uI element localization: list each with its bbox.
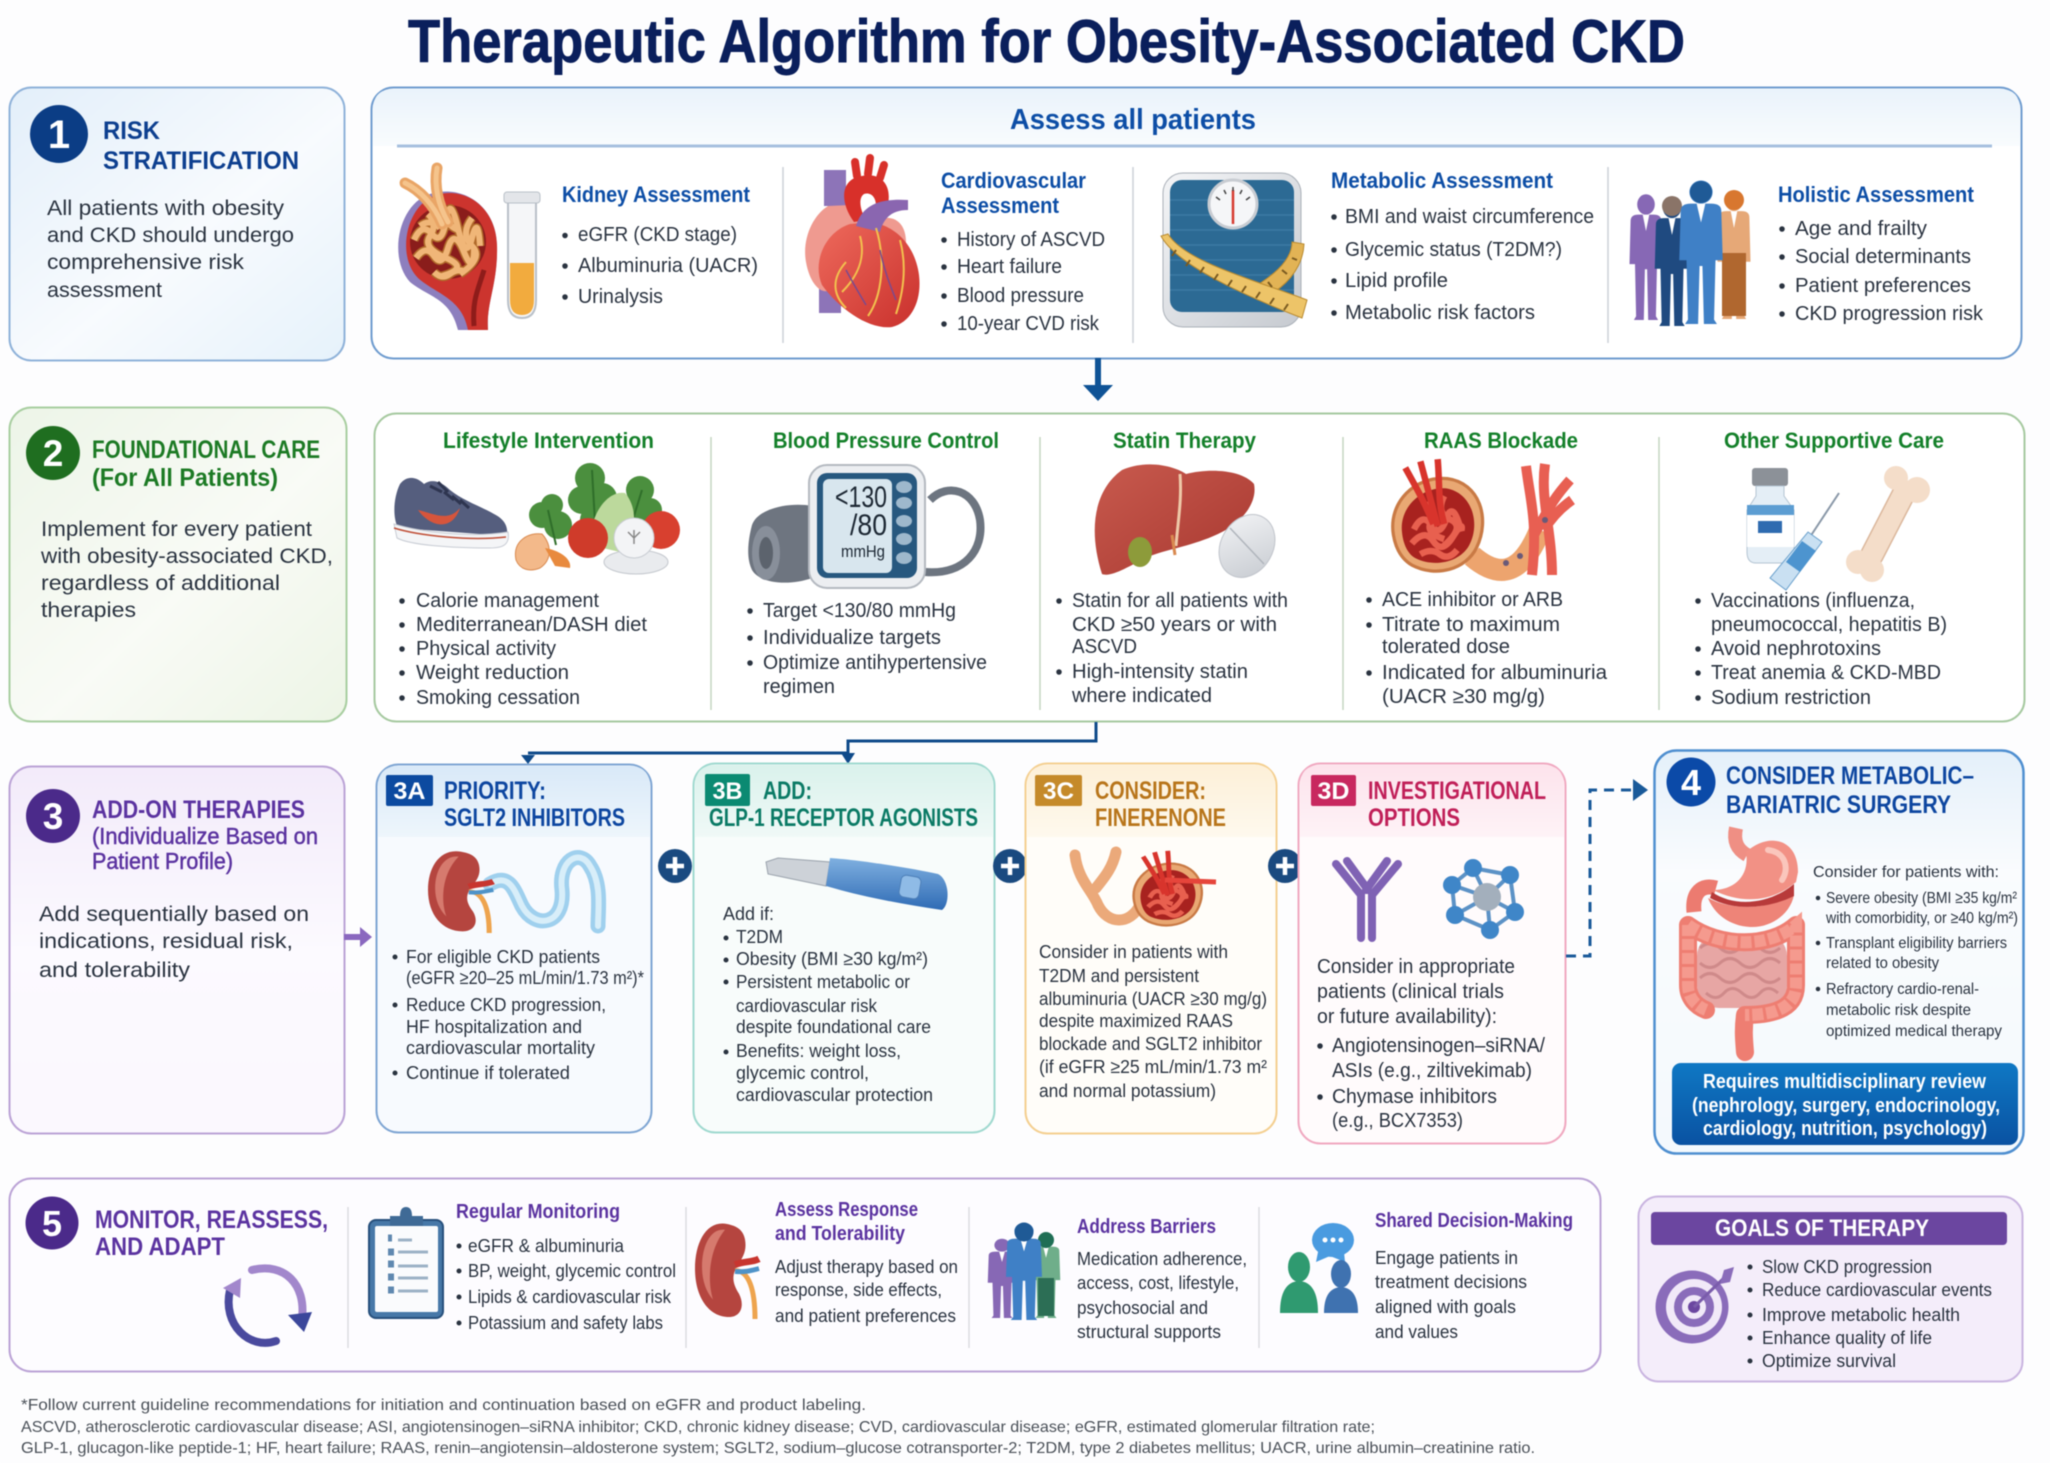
panel: goals of therapy	[1638, 1196, 2022, 1382]
list: statin: ASCVD	[1072, 636, 1137, 658]
text: add-on therapies description: indications, residual risk,	[39, 929, 293, 953]
block: assess response and tolerability: Adjust therapy based on	[775, 1256, 958, 1277]
list: bariatric criteria: Refractory cardio-renal-	[1826, 981, 1979, 998]
footnotes	[21, 1397, 1535, 1457]
list: GLP-1: glycemic control,	[736, 1062, 869, 1083]
text: add-on therapies description: Add sequentially based on	[39, 902, 309, 926]
text: monitor display	[835, 481, 887, 561]
footnotes: ASCVD, atherosclerotic cardiovascular disease; ASI, angiotensinogen–siRNA inhibitor; CKD, chronic kidney disease; CVD, cardiovascular disease; eGFR, estimated glomerular filtration rate;	[21, 1419, 1375, 1436]
list: SGLT2: For eligible CKD patients	[406, 946, 600, 967]
arrow: add-on therapies to options	[344, 927, 372, 947]
block: holistic assessment: Social determinants	[1795, 246, 1971, 268]
list: lifestyle: Weight reduction	[416, 662, 569, 684]
text: foundational care description: therapies	[41, 598, 136, 622]
heading: foundational care: (For All Patients)	[92, 464, 278, 492]
icon: vegetables and food	[515, 463, 680, 574]
text: foundational care description	[40, 517, 333, 622]
badge 2: 2	[43, 433, 63, 474]
block: regular monitoring: Potassium and safety labs	[468, 1312, 663, 1333]
badge 3D: 3D	[1318, 778, 1350, 805]
block: assess response and tolerability	[695, 1199, 958, 1326]
footnotes: *Follow current guideline recommendations for initiation and continuation based on eGFR and product labeling.	[21, 1397, 866, 1414]
heading: risk stratification: STRATIFICATION	[103, 147, 299, 175]
block: holistic assessment: Age and frailty	[1795, 218, 1927, 240]
icon: heart	[805, 158, 920, 327]
text: risk stratification description: comprehensive risk	[47, 250, 244, 274]
block: metabolic assessment	[1331, 168, 1594, 324]
icon: nephron with vessels	[1393, 459, 1572, 575]
list: blood pressure: Optimize antihypertensive	[763, 652, 987, 674]
badge 3A: 3A	[394, 778, 426, 805]
callout: multidisciplinary review	[1672, 1063, 2018, 1145]
badge 3C: 3C	[1043, 778, 1074, 805]
list: goals: Optimize survival	[1762, 1350, 1896, 1371]
text: foundational care description: with obesity-associated CKD,	[40, 544, 333, 568]
badge 3B: 3B	[712, 778, 742, 805]
list: GLP-1: cardiovascular risk	[736, 995, 878, 1016]
heading: goals of therapy: GOALS OF THERAPY	[1715, 1215, 1929, 1242]
block: metabolic assessment: Metabolic Assessment	[1331, 168, 1554, 193]
list: blood pressure	[750, 600, 987, 698]
column: blood pressure control	[748, 428, 999, 698]
list: statin	[1059, 590, 1288, 707]
column: other supportive care: Other Supportive Care	[1724, 428, 1944, 453]
block: regular monitoring: BP, weight, glycemic control	[468, 1260, 676, 1281]
block: cardiovascular assessment: Heart failure	[957, 256, 1062, 278]
block: cardiovascular assessment: Assessment	[941, 193, 1060, 218]
heading: metabolic-bariatric surgery: CONSIDER METABOLIC–	[1726, 762, 1974, 790]
badge 4: 4	[1681, 762, 1701, 803]
panel: 3B GLP-1 receptor agonists	[694, 764, 994, 1132]
panel: 3D investigational options	[1298, 764, 1566, 1144]
list: raas	[1369, 589, 1608, 708]
panel: 3 add-on therapies	[10, 766, 344, 1134]
heading: metabolic-bariatric surgery	[1726, 762, 1974, 819]
icon: plus 3	[1268, 849, 1302, 883]
block: shared decision-making: Engage patients in	[1375, 1247, 1518, 1268]
icon: kidney	[695, 1223, 759, 1319]
panel: 5 monitor, reassess, adapt	[10, 1178, 1600, 1372]
text: finerenone: despite maximized RAAS	[1039, 1010, 1233, 1031]
text: foundational care description: Implement for every patient	[41, 517, 312, 541]
list: lifestyle: Smoking cessation	[416, 687, 580, 709]
panel: 2 foundational care	[10, 408, 346, 722]
icon: urine test tube	[504, 192, 540, 318]
panel: 4 metabolic-bariatric surgery	[1654, 750, 2024, 1154]
list: SGLT2: (eGFR ≥20–25 mL/min/1.73 m²)*	[406, 967, 644, 988]
list: investigational: or future availability):	[1317, 1006, 1497, 1028]
title: Therapeutic Algorithm for Obesity-Associated CKD	[408, 8, 1685, 75]
heading: add-on therapies: Patient Profile)	[92, 848, 233, 874]
block: assess response and tolerability: response, side effects,	[775, 1279, 942, 1300]
text: foundational care description: regardless of additional	[41, 571, 280, 595]
icon: injection pen	[766, 858, 948, 910]
badge 4	[1666, 758, 1716, 806]
block: address barriers	[988, 1216, 1247, 1342]
badge 5: 5	[42, 1203, 62, 1244]
block: kidney assessment: Kidney Assessment	[562, 182, 751, 207]
footnotes: GLP-1, glucagon-like peptide-1; HF, heart failure; RAAS, renin–angiotensin–aldosterone system; SGLT2, sodium–glucose cotransporter-2; T2DM, type 2 diabetes mellitus; UACR, urine albumin–creatinine ratio.	[21, 1440, 1535, 1457]
list: investigational: Chymase inhibitors	[1332, 1086, 1497, 1108]
panel: 1 risk stratification	[10, 88, 344, 360]
text: finerenone	[1039, 941, 1267, 1101]
icon: plus 1	[658, 849, 692, 883]
icon: nephron cross-section	[398, 168, 497, 330]
text: add-on therapies description	[39, 902, 309, 982]
list: other care: Treat anemia & CKD-MBD	[1711, 662, 1941, 684]
text: monitor display: /80	[850, 509, 887, 542]
block: address barriers: psychosocial and	[1077, 1297, 1208, 1318]
list: bariatric criteria: Transplant eligibility barriers	[1826, 935, 2007, 952]
arrow: foundational care to add-on therapies	[521, 722, 1096, 764]
list: blood pressure: Target <130/80 mmHg	[763, 600, 956, 622]
column: other supportive care	[1698, 428, 1947, 709]
block: cardiovascular assessment: History of ASCVD	[957, 229, 1105, 251]
list: SGLT2: HF hospitalization and	[406, 1016, 582, 1037]
icon: nephron	[1075, 851, 1216, 925]
list: raas: tolerated dose	[1382, 636, 1510, 658]
block: holistic assessment: Holistic Assessment	[1778, 182, 1975, 207]
text: finerenone: albuminuria (UACR ≥30 mg/g)	[1039, 988, 1267, 1009]
text: risk stratification description: All patients with obesity	[47, 196, 284, 220]
icon: liver and pill	[1095, 464, 1286, 588]
block: metabolic assessment: Lipid profile	[1345, 270, 1448, 292]
block: cardiovascular assessment: 10-year CVD risk	[957, 313, 1100, 335]
column: lifestyle intervention	[394, 428, 680, 709]
block: shared decision-making	[1280, 1210, 1573, 1342]
text: monitor display: <130	[835, 481, 887, 514]
text: monitor display: mmHg	[841, 542, 885, 561]
badge 3C	[1035, 775, 1082, 806]
block: shared decision-making: treatment decisions	[1375, 1271, 1527, 1292]
list: other care	[1698, 590, 1947, 709]
list: GLP-1: cardiovascular protection	[736, 1084, 933, 1105]
panel: 3C finerenone	[1026, 764, 1276, 1134]
column: statin therapy: Statin Therapy	[1113, 428, 1257, 453]
block: assess response and tolerability: and Tolerability	[775, 1223, 906, 1245]
callout: multidisciplinary review: Requires multidisciplinary review	[1703, 1071, 1986, 1093]
block: assess response and tolerability: Assess Response	[775, 1199, 918, 1221]
block: holistic assessment	[1778, 182, 1984, 325]
list: SGLT2: cardiovascular mortality	[406, 1037, 596, 1058]
heading: SGLT2 inhibitors: PRIORITY:	[444, 777, 546, 805]
panel: 3A SGLT2 inhibitors	[376, 764, 652, 1132]
list: bariatric criteria	[1813, 864, 2018, 1040]
block: assess response and tolerability: and patient preferences	[775, 1305, 956, 1326]
heading: finerenone: FINERENONE	[1095, 804, 1226, 832]
column: raas blockade: RAAS Blockade	[1424, 428, 1578, 453]
block: address barriers: Medication adherence,	[1077, 1248, 1247, 1269]
heading: add-on therapies: ADD-ON THERAPIES	[92, 796, 305, 824]
list: GLP-1: Obesity (BMI ≥30 kg/m²)	[736, 948, 928, 969]
block: shared decision-making: Shared Decision-Making	[1375, 1210, 1573, 1232]
block: metabolic assessment: Glycemic status (T2DM?)	[1345, 239, 1562, 261]
list: GLP-1	[723, 903, 933, 1105]
heading: investigational options	[1368, 777, 1546, 832]
heading: risk stratification: RISK	[103, 117, 160, 145]
heading: investigational options: INVESTIGATIONAL	[1368, 777, 1546, 805]
text: finerenone: T2DM and persistent	[1039, 965, 1199, 986]
badge 3: 3	[43, 796, 63, 837]
list: other care: Sodium restriction	[1711, 687, 1871, 709]
block: regular monitoring	[369, 1201, 676, 1333]
text: finerenone: and normal potassium)	[1039, 1080, 1216, 1101]
list: investigational: Angiotensinogen–siRNA/	[1332, 1035, 1545, 1057]
heading: monitor, reassess, adapt: AND ADAPT	[95, 1233, 225, 1261]
list: raas: ACE inhibitor or ARB	[1382, 589, 1563, 611]
badge 2	[26, 426, 80, 480]
list: other care: Avoid nephrotoxins	[1711, 638, 1881, 660]
block: address barriers: access, cost, lifestyle,	[1077, 1272, 1239, 1293]
list: blood pressure: Individualize targets	[763, 627, 941, 649]
block: address barriers: structural supports	[1077, 1321, 1221, 1342]
list: GLP-1: despite foundational care	[736, 1016, 931, 1037]
list: lifestyle: Mediterranean/DASH diet	[416, 614, 647, 636]
icon: cycle arrows	[223, 1268, 312, 1343]
list: GLP-1: Add if:	[723, 903, 774, 924]
heading: add-on therapies: (Individualize Based on	[92, 823, 318, 849]
list: lifestyle: Physical activity	[416, 638, 556, 660]
list: statin: CKD ≥50 years or with	[1072, 614, 1277, 636]
arrow: assessment to foundational care	[1083, 358, 1113, 401]
list: raas: (UACR ≥30 mg/g)	[1382, 686, 1545, 708]
list: bariatric criteria: metabolic risk despite	[1826, 1002, 1971, 1019]
heading: finerenone	[1095, 777, 1226, 832]
list: goals: Slow CKD progression	[1762, 1256, 1932, 1277]
list: bariatric criteria: optimized medical therapy	[1826, 1023, 2002, 1040]
badge 3D	[1311, 775, 1356, 806]
heading: goals of therapy	[1651, 1212, 2007, 1245]
text: finerenone: Consider in patients with	[1039, 941, 1228, 962]
block: kidney assessment	[562, 182, 758, 308]
list: other care: pneumococcal, hepatitis B)	[1711, 614, 1947, 636]
block: address barriers: Address Barriers	[1077, 1216, 1216, 1238]
text: finerenone: (if eGFR ≥25 mL/min/1.73 m²	[1039, 1056, 1267, 1077]
badge 1	[30, 105, 88, 163]
list: GLP-1: T2DM	[736, 926, 783, 947]
list: SGLT2: Continue if tolerated	[406, 1062, 570, 1083]
column: blood pressure control: Blood Pressure Control	[773, 428, 999, 453]
heading: foundational care	[92, 436, 320, 492]
icon: stomach and intestines	[1688, 828, 1798, 1052]
heading: GLP-1 receptor agonists: ADD:	[763, 777, 812, 805]
list: raas: Indicated for albuminuria	[1382, 662, 1608, 684]
heading: monitor, reassess, adapt	[95, 1206, 328, 1261]
list: goals: Reduce cardiovascular events	[1762, 1279, 1992, 1300]
text: risk stratification description: and CKD should undergo	[47, 223, 294, 247]
heading: SGLT2 inhibitors	[444, 777, 625, 832]
arrow: dashed to bariatric surgery	[1566, 779, 1648, 956]
icon: plus 2	[993, 849, 1027, 883]
heading: foundational care: FOUNDATIONAL CARE	[92, 436, 320, 464]
block: regular monitoring: eGFR & albuminuria	[468, 1235, 625, 1256]
text: risk stratification description: assessment	[47, 278, 162, 302]
icon: molecule	[1443, 859, 1524, 939]
list: bariatric criteria: Severe obesity (BMI ≥35 kg/m²	[1826, 890, 2018, 907]
block: regular monitoring: Lipids & cardiovascular risk	[468, 1286, 672, 1307]
text: finerenone: blockade and SGLT2 inhibitor	[1039, 1033, 1262, 1054]
panel: foundational care interventions	[374, 414, 2024, 722]
column: raas blockade	[1369, 428, 1608, 708]
list: GLP-1: Persistent metabolic or	[736, 971, 910, 992]
badge 3	[26, 789, 80, 843]
list: lifestyle: Calorie management	[416, 590, 599, 612]
callout: multidisciplinary review: cardiology, nutrition, psychology)	[1703, 1118, 1987, 1140]
list: investigational: patients (clinical trials	[1317, 981, 1504, 1003]
block: cardiovascular assessment: Blood pressure	[957, 285, 1084, 307]
list: raas: Titrate to maximum	[1382, 614, 1560, 636]
heading: risk stratification	[103, 117, 299, 175]
list: SGLT2: Reduce CKD progression,	[406, 994, 606, 1015]
list: goals	[1750, 1256, 1992, 1371]
icon: blood pressure monitor	[748, 465, 981, 588]
list: blood pressure: regimen	[763, 676, 835, 698]
block: holistic assessment: Patient preferences	[1795, 275, 1971, 297]
list: goals: Improve metabolic health	[1762, 1304, 1960, 1325]
heading: monitor, reassess, adapt: MONITOR, REASSESS,	[95, 1206, 328, 1234]
block: regular monitoring: Regular Monitoring	[456, 1201, 620, 1223]
text: add-on therapies description: and tolerability	[39, 958, 190, 982]
badge 3A	[386, 775, 433, 806]
list: lifestyle	[402, 590, 647, 709]
text: risk stratification description	[47, 196, 294, 302]
badge 3B	[705, 774, 750, 806]
column: statin therapy	[1059, 428, 1288, 707]
icon: running shoe	[394, 478, 508, 548]
icon: group of people	[1630, 180, 1750, 326]
column: lifestyle intervention: Lifestyle Intervention	[443, 428, 654, 453]
panel: assess all patients	[372, 88, 2022, 358]
heading: investigational options: OPTIONS	[1368, 804, 1460, 832]
heading: GLP-1 receptor agonists	[709, 777, 978, 832]
block: cardiovascular assessment	[941, 168, 1105, 335]
list: SGLT2	[395, 946, 644, 1083]
block: kidney assessment: eGFR (CKD stage)	[578, 224, 737, 246]
block: shared decision-making: and values	[1375, 1321, 1458, 1342]
icon: scale with measuring tape	[1161, 173, 1307, 327]
block: holistic assessment: CKD progression risk	[1795, 303, 1984, 325]
list: bariatric criteria: Consider for patients with:	[1813, 864, 1999, 881]
icon: three people	[988, 1222, 1060, 1320]
block: kidney assessment: Albuminuria (UACR)	[578, 255, 758, 277]
list: bariatric criteria: related to obesity	[1826, 955, 1939, 972]
heading: SGLT2 inhibitors: SGLT2 INHIBITORS	[444, 804, 625, 832]
list: investigational: ASIs (e.g., ziltivekimab)	[1332, 1060, 1532, 1082]
icon: vial, syringe and bone	[1747, 466, 1930, 590]
icon: antibody	[1336, 861, 1398, 938]
list: investigational: (e.g., BCX7353)	[1332, 1110, 1463, 1132]
list: statin: Statin for all patients with	[1072, 590, 1288, 612]
list: investigational: Consider in appropriate	[1317, 956, 1515, 978]
badge 1: 1	[48, 113, 70, 157]
icon: two people and speech bubble	[1280, 1223, 1358, 1313]
block: metabolic assessment: BMI and waist circumference	[1345, 206, 1594, 228]
list: statin: High-intensity statin	[1072, 661, 1248, 683]
block: shared decision-making: aligned with goals	[1375, 1296, 1516, 1317]
list: bariatric criteria: with comorbidity, or ≥40 kg/m²)	[1825, 910, 2018, 927]
icon: clipboard	[369, 1207, 443, 1318]
list: statin: where indicated	[1071, 685, 1212, 707]
icon: kidney and glucose tube	[428, 851, 599, 933]
list: goals: Enhance quality of life	[1762, 1327, 1932, 1348]
heading: finerenone: CONSIDER:	[1095, 777, 1206, 805]
badge 5	[26, 1196, 78, 1250]
callout: multidisciplinary review: (nephrology, surgery, endocrinology,	[1692, 1095, 2000, 1117]
list: investigational	[1317, 956, 1545, 1132]
icon: target with arrow	[1656, 1267, 1734, 1344]
block: cardiovascular assessment: Cardiovascular	[941, 168, 1086, 193]
block: metabolic assessment: Metabolic risk factors	[1345, 302, 1535, 324]
list: other care: Vaccinations (influenza,	[1711, 590, 1915, 612]
heading: assess all patients: Assess all patients	[1010, 104, 1256, 136]
heading: metabolic-bariatric surgery: BARIATRIC SURGERY	[1726, 791, 1951, 819]
heading: GLP-1 receptor agonists: GLP-1 RECEPTOR AGONISTS	[709, 804, 978, 832]
heading: add-on therapies	[92, 796, 318, 874]
list: GLP-1: Benefits: weight loss,	[736, 1040, 901, 1061]
block: kidney assessment: Urinalysis	[578, 286, 663, 308]
